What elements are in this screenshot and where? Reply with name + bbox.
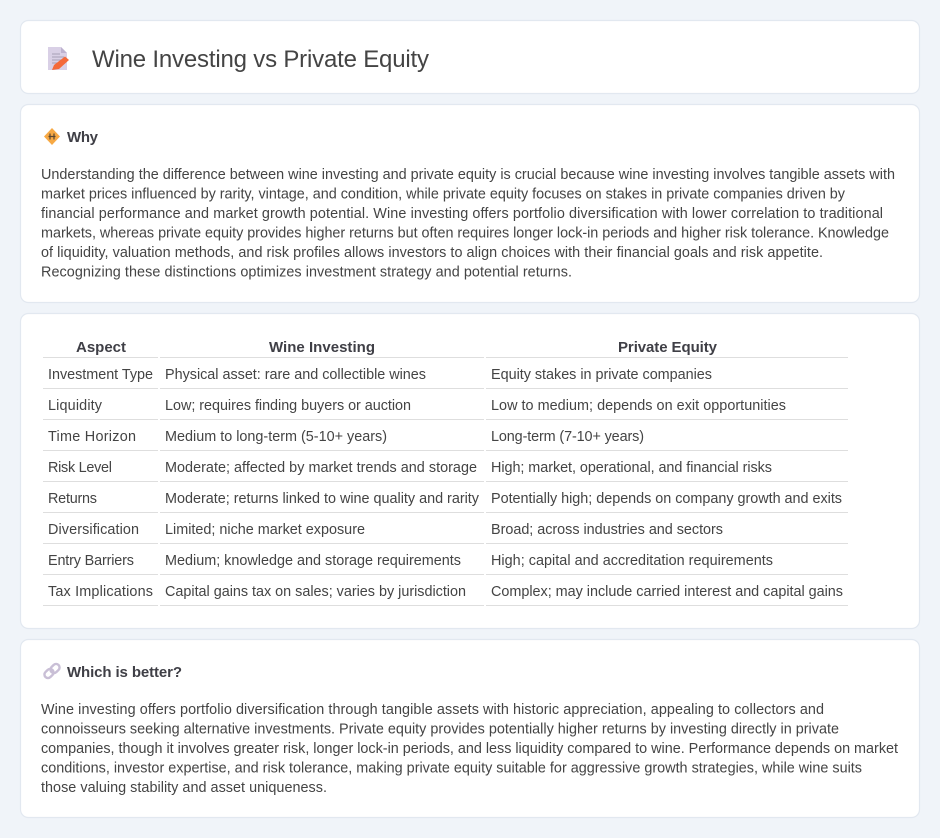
title: Wine Investing vs Private Equity xyxy=(92,46,429,73)
row: time horizon: Time Horizon xyxy=(48,429,136,445)
icon: link xyxy=(43,662,61,680)
row: tax implications: Capital gains tax on sales; varies by jurisdiction xyxy=(165,584,466,600)
row: investment type: Equity stakes in private companies xyxy=(491,367,712,383)
row: risk level: Moderate; affected by market trends and storage xyxy=(165,460,477,476)
row: time horizon xyxy=(48,429,644,445)
text block: which paragraph: connoisseurs seeking alternative investments. Private equity provides potentially higher returns by investing directly in private xyxy=(41,722,839,738)
row: tax implications xyxy=(48,584,843,600)
text block: which paragraph: Wine investing offers portfolio diversification through tangible assets with historic appreciation, appealing to collectors and xyxy=(41,702,824,718)
row: entry barriers xyxy=(48,553,773,569)
row: entry barriers: Entry Barriers xyxy=(48,553,134,569)
table header: Aspect xyxy=(76,339,126,356)
row: liquidity xyxy=(48,398,786,414)
text block: why paragraph: market prices influenced by rarity, vintage, and condition, while private equity focuses on stakes in private companies driven by xyxy=(41,186,846,202)
row: diversification: Limited; niche market exposure xyxy=(165,522,365,538)
row: time horizon: Long-term (7-10+ years) xyxy=(491,429,644,445)
row: returns: Returns xyxy=(48,491,97,507)
row: risk level xyxy=(48,460,772,476)
row: returns: Potentially high; depends on company growth and exits xyxy=(491,491,842,507)
panel: why xyxy=(20,104,920,302)
panel: comparison table xyxy=(20,314,920,628)
row: risk level: Risk Level xyxy=(48,460,112,476)
heading: which is better: Which is better? xyxy=(67,664,182,681)
row: liquidity: Liquidity xyxy=(48,398,103,414)
text block: which paragraph xyxy=(41,702,898,796)
panel: header xyxy=(20,20,920,94)
row: investment type: Investment Type xyxy=(48,367,153,383)
text block: why paragraph: Recognizing these distinctions optimizes investment strategy and potential returns. xyxy=(41,264,572,280)
text block: why paragraph xyxy=(41,167,895,280)
icon: document with pencil xyxy=(48,47,69,70)
text block: which paragraph: those valuing stability and asset uniqueness. xyxy=(41,780,327,796)
row: investment type xyxy=(48,367,712,383)
text block: why paragraph: of liquidity, valuation methods, and risk profiles allows investors to align choices with their financial goals and risk appetite. xyxy=(41,245,823,261)
row: tax implications: Tax Implications xyxy=(48,584,153,600)
table header: Wine Investing xyxy=(269,339,375,356)
row: investment type: Physical asset: rare and collectible wines xyxy=(165,367,426,383)
row: tax implications: Complex; may include carried interest and capital gains xyxy=(491,584,843,600)
row: risk level: High; market, operational, and financial risks xyxy=(491,460,772,476)
panel: which is better xyxy=(20,640,920,818)
icon: warning diamond xyxy=(44,128,60,145)
text block: why paragraph: Understanding the difference between wine investing and private equity is crucial because wine investing involves tangible assets with xyxy=(41,167,895,183)
row: diversification: Broad; across industries and sectors xyxy=(491,522,723,538)
row: liquidity: Low; requires finding buyers or auction xyxy=(165,398,411,414)
row: returns: Moderate; returns linked to wine quality and rarity xyxy=(165,491,480,507)
row: time horizon: Medium to long-term (5-10+ years) xyxy=(165,429,387,445)
table header: Private Equity xyxy=(618,339,718,356)
text block: why paragraph: financial performance and market growth potential. Wine investing offers portfolio diversification with lower correlation to traditional xyxy=(41,206,883,222)
row: entry barriers: High; capital and accreditation requirements xyxy=(491,553,773,569)
text block: which paragraph: companies, though it involves greater risk, longer lock-in periods, and less liquidity compared to wine. Performance depends on market xyxy=(41,741,898,757)
row: liquidity: Low to medium; depends on exit opportunities xyxy=(491,398,786,414)
row: entry barriers: Medium; knowledge and storage requirements xyxy=(165,553,461,569)
row: diversification: Diversification xyxy=(48,522,139,538)
heading: why: Why xyxy=(67,129,99,146)
text block: which paragraph: conditions, investor expertise, and risk tolerance, making private equity suitable for aggressive growth strategies, while wine suits xyxy=(41,760,862,776)
row: diversification xyxy=(48,522,723,538)
table header xyxy=(76,339,718,356)
text block: why paragraph: markets, whereas private equity provides higher returns but often requires longer lock-in periods and higher risk tolerance. Knowledge xyxy=(41,226,889,242)
row: returns xyxy=(48,491,842,507)
